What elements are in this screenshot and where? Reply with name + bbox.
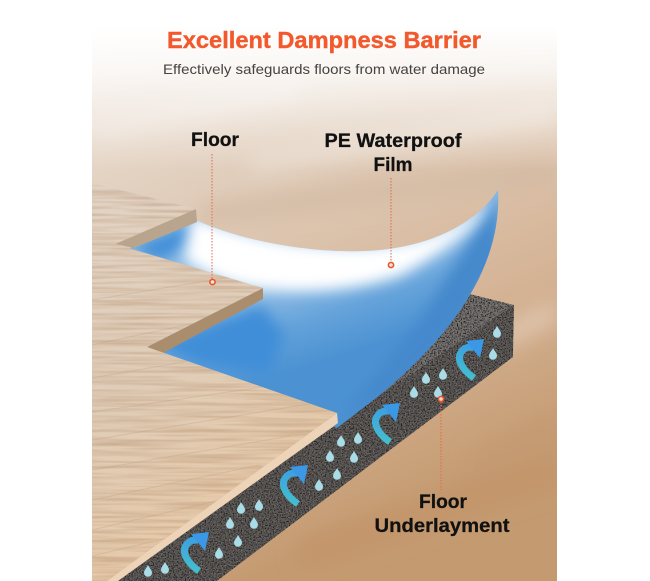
foam underlayment <box>112 294 514 581</box>
callout: floor <box>191 130 240 285</box>
water arrows <box>184 339 484 571</box>
callout: floor underlayment: Floor <box>419 492 468 513</box>
water drops <box>144 326 501 577</box>
infographic: dampness barrier <box>92 30 557 581</box>
wood grain <box>92 183 337 581</box>
callout: PE waterproof film: Film <box>374 155 412 176</box>
PE waterproof film <box>130 190 500 428</box>
callout: PE waterproof film <box>324 131 462 268</box>
plank top face <box>92 183 337 581</box>
callout: PE waterproof film: PE Waterproof <box>324 131 462 152</box>
foam front face <box>112 305 514 581</box>
title: Excellent Dampness Barrier <box>167 27 481 53</box>
subtitle: Effectively safeguards floors from water damage <box>163 61 485 77</box>
callout: floor underlayment: Underlayment <box>374 516 510 537</box>
foam top surface <box>335 294 514 430</box>
wood grain streaks <box>92 272 320 556</box>
callout: floor: Floor <box>191 130 240 151</box>
background: wood surface <box>92 0 557 581</box>
callout: floor underlayment <box>374 396 510 537</box>
plank cut edges <box>107 209 338 581</box>
floor plank <box>92 183 338 581</box>
